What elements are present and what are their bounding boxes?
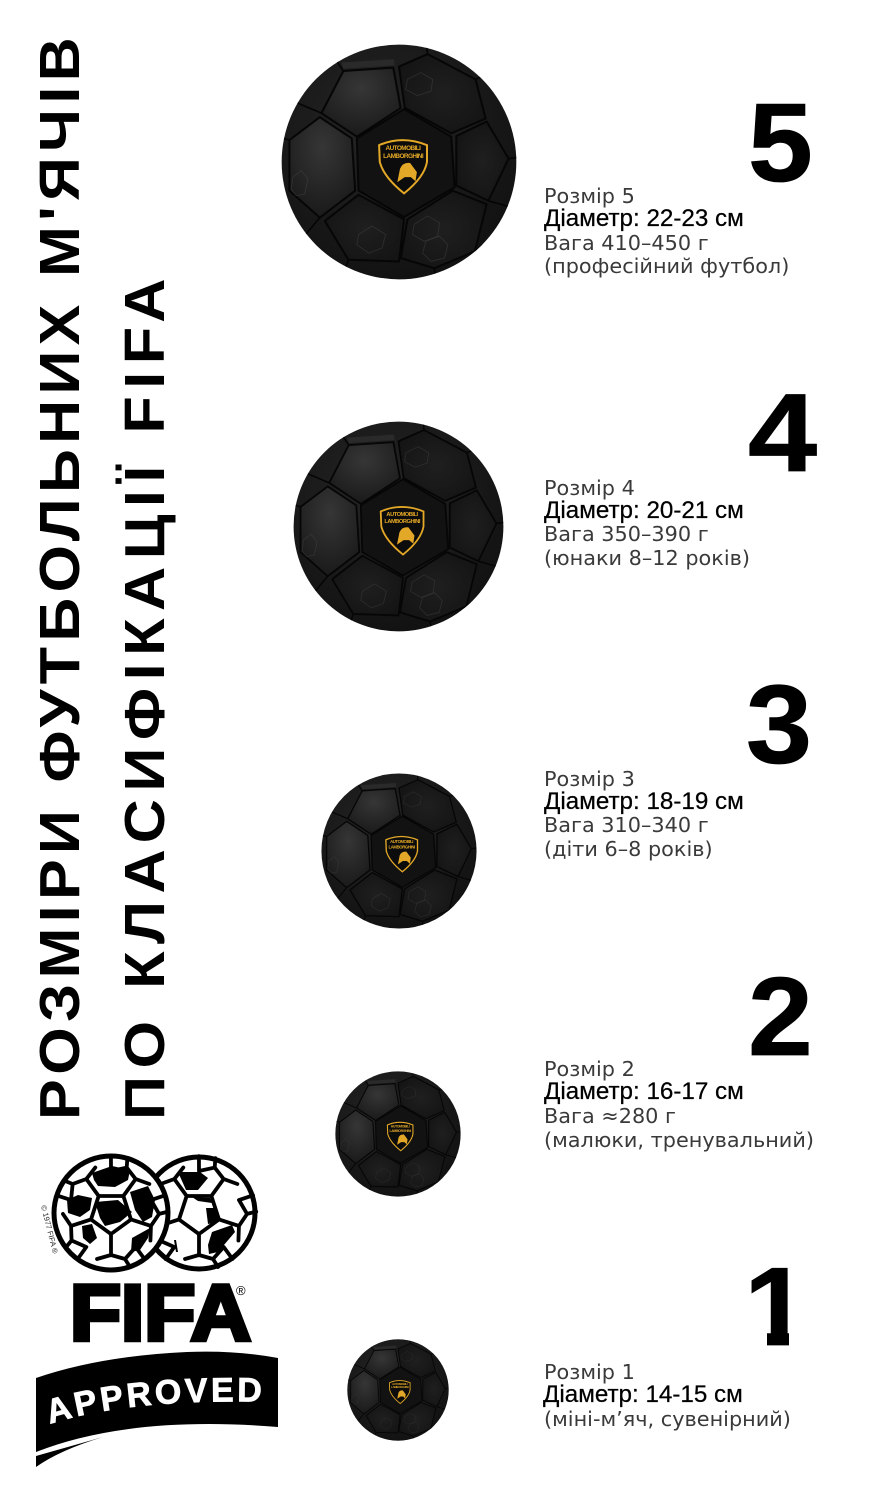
badge text: LAMBORGHINI xyxy=(383,153,424,160)
badge text: AUTOMOBILI xyxy=(390,839,413,844)
title xyxy=(28,32,177,1120)
badge text: AUTOMOBILI xyxy=(391,1125,410,1129)
numeral 3: 3 xyxy=(746,664,812,787)
size 4 details: Вага 350–390 г xyxy=(544,522,709,546)
size 4 details: (юнаки 8–12 років) xyxy=(544,546,750,570)
registered mark: ® xyxy=(236,1283,246,1298)
size 4 details: Діаметр: 20-21 см xyxy=(544,497,744,524)
ball size 1 xyxy=(346,1338,450,1442)
ball size 5 xyxy=(278,42,520,282)
size 2 details: (малюки, тренувальний) xyxy=(544,1128,814,1152)
size 1 details: (міні-м’яч, сувенірний) xyxy=(544,1407,791,1431)
FIFA approved logo xyxy=(36,1154,278,1467)
badge text xyxy=(383,145,424,160)
badge text: AUTOMOBILI xyxy=(392,1382,408,1386)
size 2 details xyxy=(544,1057,814,1152)
size 3 details xyxy=(544,767,744,861)
size 1 details xyxy=(543,1360,791,1431)
size 3 details: Діаметр: 18-19 см xyxy=(544,788,744,815)
size 4 details: Розмір 4 xyxy=(544,476,635,500)
size 2 details: Розмір 2 xyxy=(544,1057,635,1081)
ball size 4 xyxy=(290,419,507,634)
approved banner: APPROVED xyxy=(50,1378,261,1424)
size 5 details: Вага 410–450 г xyxy=(544,231,709,255)
badge text: LAMBORGHINI xyxy=(389,844,415,849)
size 3 details: Розмір 3 xyxy=(544,767,635,791)
badge text: AUTOMOBILI xyxy=(386,512,418,518)
badge text: LAMBORGHINI xyxy=(391,1385,409,1389)
size 4 details xyxy=(544,476,750,570)
size 3 details: Вага 310–340 г xyxy=(544,813,709,837)
size 3 details: (діти 6–8 років) xyxy=(544,837,713,861)
copyright note: © 1977 FIFA ® xyxy=(39,1204,60,1255)
badge text xyxy=(390,1125,411,1133)
badge text xyxy=(388,839,415,849)
title line 2: ПО КЛАСИФІКАЦІЇ FIFA xyxy=(113,271,177,1120)
approved banner xyxy=(36,1352,278,1467)
numeral 4: 4 xyxy=(748,370,817,495)
size 1 details: Діаметр: 14-15 см xyxy=(543,1381,743,1408)
ball size 3 xyxy=(319,772,479,930)
badge text xyxy=(391,1382,409,1389)
numeral 1: 1 xyxy=(744,1246,809,1369)
badge text xyxy=(384,512,421,525)
size 5 details: Діаметр: 22-23 см xyxy=(544,205,744,232)
size 1 details: Розмір 1 xyxy=(544,1360,635,1384)
size 2 details: Діаметр: 16-17 см xyxy=(544,1078,744,1105)
badge text: AUTOMOBILI xyxy=(386,145,421,152)
numeral 2: 2 xyxy=(748,956,813,1079)
size 5 details xyxy=(544,184,789,278)
size 5 details: Розмір 5 xyxy=(544,184,635,208)
FIFA wordmark: FIFA xyxy=(70,1268,251,1357)
title line 1: РОЗМІРИ ФУТБОЛЬНИХ М'ЯЧІВ xyxy=(28,32,92,1120)
ball size 2 xyxy=(333,1070,463,1198)
numeral 5: 5 xyxy=(748,82,813,205)
size 5 details: (професійний футбол) xyxy=(544,254,789,278)
logo footballs xyxy=(52,1150,261,1270)
badge text: LAMBORGHINI xyxy=(390,1129,411,1133)
size 2 details: Вага ≈280 г xyxy=(544,1104,676,1128)
badge text: LAMBORGHINI xyxy=(384,519,421,525)
